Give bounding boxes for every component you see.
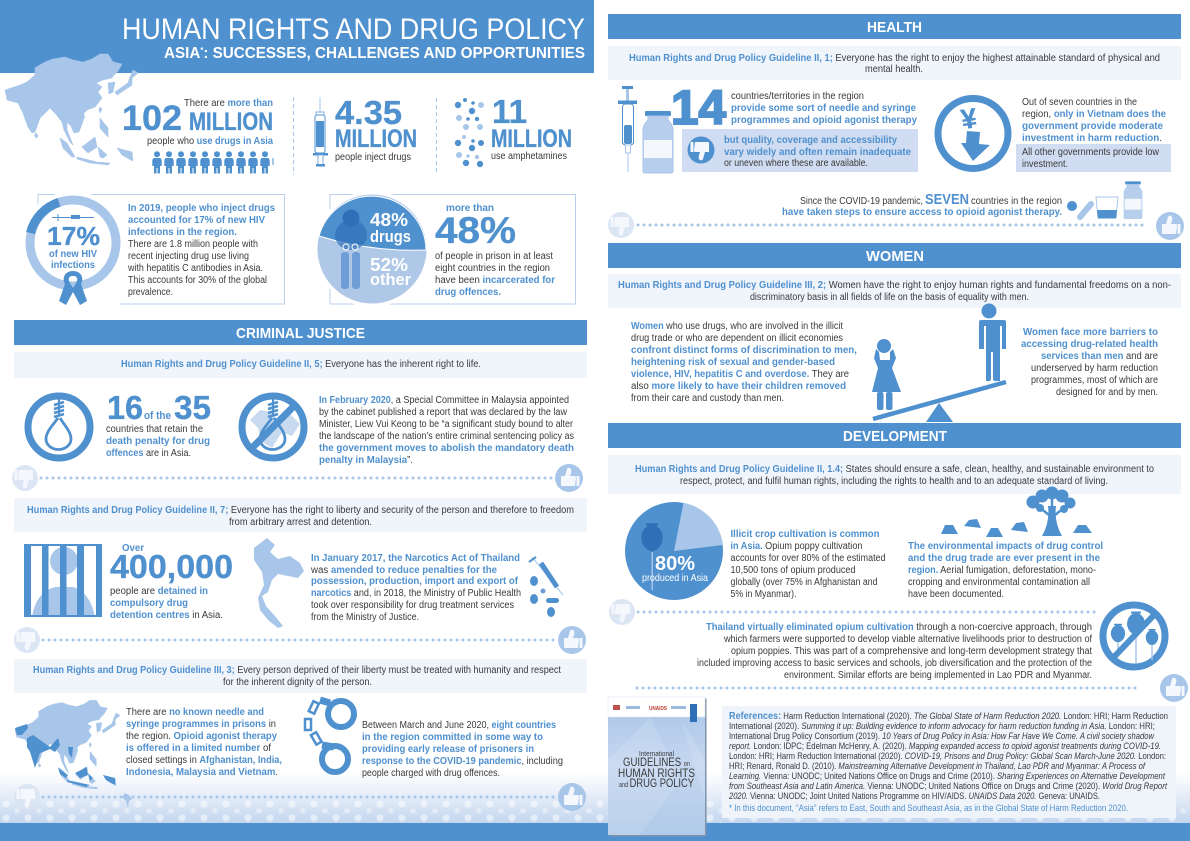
stat: 16 of the 35: countries that retain the bbox=[106, 424, 203, 435]
section heading: development: DEVELOPMENT bbox=[843, 428, 947, 445]
stat: 4.35 million inject: people inject drugs bbox=[335, 151, 411, 163]
stat: 16 of the 35: 16 bbox=[107, 389, 143, 426]
text: COVID-19 opioid agonist bbox=[782, 191, 1062, 218]
text: Malaysia bbox=[319, 395, 574, 466]
callout: quality inadequate: or uneven where these are available. bbox=[724, 158, 868, 169]
icon: person behind bars bbox=[24, 544, 102, 617]
text block: infections in the region. bbox=[128, 227, 237, 238]
text: early release: response to the COVID-19 pandemic, including bbox=[362, 756, 563, 767]
booklet cover: and DRUG POLICY bbox=[619, 776, 694, 790]
section heading: women bbox=[608, 243, 1181, 268]
text: women discrimination: from their care and custody than men. bbox=[631, 393, 784, 404]
text: investment in harm reduction: region, only in Vietnam does the bbox=[1022, 109, 1166, 120]
text: Thailand eliminated opium: included improving access to basic services and schools, job diversification and the protection of the bbox=[697, 658, 1092, 669]
references panel bbox=[722, 706, 1176, 818]
pie chart: 80% produced in Asia: 80% bbox=[655, 553, 695, 575]
text: Thailand narcotics act: In January 2017, the Narcotics Act of Thailand bbox=[311, 553, 520, 564]
panel: prison bbox=[314, 191, 576, 307]
references panel: * In this document, “Asia” refers to East, South and Southeast Asia, as in the Global State of Harm Reduction 2020. bbox=[729, 803, 1128, 813]
text: women discrimination: drug trade or who are dependent on illicit economies bbox=[631, 333, 843, 344]
stat: 102 million people use drugs: There are more than bbox=[184, 97, 273, 109]
text: Thailand eliminated opium: opium poppies. This was part of a comprehensive and long-term development strategy that bbox=[731, 646, 1092, 657]
guideline III, 3: for the inherent dignity of the person. bbox=[223, 677, 372, 688]
title: HUMAN RIGHTS AND DRUG POLICY bbox=[122, 13, 585, 46]
guideline II, 7: Human Rights and Drug Policy Guideline II, 7; Everyone has the right to liberty and security of the person and therefore to freedom bbox=[27, 505, 574, 516]
text block bbox=[435, 203, 555, 298]
icon: syringe and pills bbox=[529, 557, 563, 617]
callout: quality inadequate: but quality, coverage and accessibility bbox=[724, 135, 897, 146]
text: Thailand narcotics act: from the Ministry of Justice. bbox=[311, 612, 419, 623]
text block bbox=[127, 203, 275, 298]
icons: pills, cup and vial bbox=[1067, 181, 1142, 219]
references panel: International Drug Policy Consortium (2019). 10 Years of Drug Policy in Asia: How Far Have We Come. A civil society shadow bbox=[729, 731, 1154, 741]
pie chart: drugs vs other: 52% bbox=[370, 255, 408, 275]
text block: drug offences. bbox=[435, 287, 501, 298]
text: Thailand narcotics act: narcotics and, in 2018, the Ministry of Public Health bbox=[311, 588, 521, 599]
stat: 11 million amphetamines: 11 bbox=[492, 93, 527, 130]
booklet cover bbox=[608, 697, 706, 836]
guideline II, 1.4 bbox=[608, 455, 1181, 494]
text: environmental impacts: region. Aerial fumigation, deforestation, mono- bbox=[908, 565, 1096, 576]
text block: prevalence. bbox=[128, 287, 173, 298]
text: Thailand eliminated opium: which farmers were supported to develop viable alternative livelihoods prior to destruction of bbox=[723, 634, 1092, 645]
guideline II, 1: Human Rights and Drug Policy Guideline II, 1; Everyone has the right to enjoy the highest attainable standard of physical and bbox=[629, 53, 1160, 64]
text: women face more barriers: services than men and are bbox=[1041, 351, 1158, 362]
icon: no poppies bbox=[1103, 605, 1165, 667]
pie chart: drugs vs other: 48% bbox=[370, 210, 408, 230]
icon: Asia map with highlights bbox=[15, 700, 120, 789]
text block: In 2019, people who inject drugs bbox=[128, 203, 275, 214]
guideline II, 1: mental health. bbox=[865, 64, 923, 75]
icon: tree and stumps bbox=[941, 486, 1092, 537]
stat: 400,000 detained bbox=[110, 543, 233, 621]
guideline III, 3 bbox=[14, 659, 587, 693]
text block: have been incarcerated for bbox=[435, 275, 555, 286]
divider with thumbs: health bbox=[608, 212, 1184, 240]
text block: of people in prison in at least bbox=[435, 251, 553, 262]
text: Malaysia: Minister, Liew Vui Keong to be “a significant study bound to alter bbox=[319, 419, 574, 430]
text: needle and syringe in prisons: syringe programmes in prisons in bbox=[126, 719, 276, 730]
pie chart: drugs vs other bbox=[314, 191, 430, 307]
section heading: criminal justice bbox=[14, 320, 587, 345]
text: investment in harm reduction: investment. bbox=[1022, 159, 1068, 170]
donut chart 17% bbox=[21, 191, 125, 306]
divider with thumbs: justice 2 bbox=[14, 626, 586, 654]
guideline III, 2 bbox=[608, 274, 1181, 308]
text block: eight countries in the region bbox=[435, 263, 550, 274]
booklet cover: HUMAN RIGHTS bbox=[618, 766, 695, 780]
stat: 400,000 detained: Over bbox=[122, 543, 144, 554]
text: women discrimination bbox=[631, 321, 857, 404]
divider with thumb up: development bbox=[637, 674, 1188, 702]
text: women discrimination: Women who use drugs, who are involved in the illicit bbox=[631, 321, 843, 332]
booklet cover: UNAIDS bbox=[649, 706, 668, 712]
text: Thailand narcotics act: possession, production, import and export of bbox=[311, 576, 519, 587]
text: environmental impacts: The environmental impacts of drug control bbox=[908, 541, 1103, 552]
text block: with hepatitis C antibodies in Asia. bbox=[127, 263, 263, 274]
stat: 11 million amphetamines: use amphetamines bbox=[491, 150, 567, 162]
text: early release: Between March and June 2020, eight countries bbox=[362, 720, 556, 731]
text: needle and syringe in prisons: Indonesia, Malaysia and Vietnam. bbox=[126, 767, 278, 778]
text: women discrimination: violence, HIV, hepatitis C and overdose. They are bbox=[631, 369, 849, 380]
text: COVID-19 opioid agonist: Since the COVID-19 pandemic, bbox=[800, 196, 923, 207]
references panel: International (2020). Summing it up: Building evidence to inform advocacy for harm reduction funding in Asia. London: HRI; bbox=[729, 721, 1155, 731]
text: illicit crop cultivation bbox=[730, 529, 886, 600]
pie chart: drugs vs other: drugs bbox=[370, 227, 411, 246]
text: Thailand narcotics act: took over responsibility for drug treatment services bbox=[311, 600, 514, 611]
panel: HIV infections: 17% bbox=[47, 221, 100, 251]
stat: 400,000 detained: compulsory drug bbox=[110, 598, 188, 609]
icon: abolish noose over map bbox=[242, 396, 304, 458]
text: early release: in the region committed in some way to bbox=[362, 732, 543, 743]
pie chart: 80% produced in Asia: produced in Asia bbox=[642, 573, 708, 584]
references panel: report. London: IDPC; Edelman McHenry, A. (2020). Mapping expanded access to opioid agonist treatments during COVID-19. bbox=[729, 741, 1161, 751]
stat: 4.35 million inject: MILLION bbox=[335, 125, 417, 153]
stat: 102 million people use drugs: people who use drugs in Asia bbox=[147, 135, 273, 147]
stat: 102 million people use drugs bbox=[122, 97, 274, 174]
text: investment in harm reduction: investment in harm reduction. bbox=[1022, 133, 1162, 144]
section heading: health: HEALTH bbox=[867, 19, 922, 36]
stat: 16 of the 35: offences are in Asia. bbox=[106, 448, 191, 459]
text: early release: providing early release of prisoners in bbox=[362, 744, 534, 755]
text block: more than bbox=[446, 203, 494, 214]
guideline II, 7 bbox=[14, 498, 587, 532]
stat: 102 million people use drugs: 102 bbox=[122, 99, 182, 138]
text: investment in harm reduction: government provide moderate bbox=[1022, 121, 1163, 132]
guideline III, 2: discriminatory basis in all fields of life on the basis of equality with men. bbox=[750, 292, 1029, 303]
text: women discrimination: also more likely to have their children removed bbox=[631, 381, 846, 392]
guideline II, 7: from arbitrary arrest and detention. bbox=[229, 517, 372, 528]
text: needle and syringe in prisons: There are no known needle and bbox=[126, 707, 264, 718]
text: women discrimination: confront distinct forms of discrimination to men, bbox=[631, 345, 857, 356]
stat: 11 million amphetamines bbox=[491, 93, 572, 162]
icon: row of people bbox=[152, 151, 274, 174]
text: COVID-19 opioid agonist: countries in the region bbox=[971, 196, 1062, 207]
text: investment in harm reduction bbox=[1016, 97, 1171, 172]
guideline II, 5: Human Rights and Drug Policy Guideline II, 5; Everyone has the inherent right to life. bbox=[121, 359, 481, 370]
text block: There are 1.8 million people with bbox=[128, 239, 258, 250]
subtitle: : SUCCESSES, CHALLENGES AND OPPORTUNITIES bbox=[203, 45, 585, 62]
stat: 400,000 detained: detention centres in Asia. bbox=[110, 610, 223, 621]
guideline II, 5 bbox=[14, 352, 587, 378]
references panel: References: Harm Reduction International (2020). The Global State of Harm Reduction 2020. London: HRI; Harm Reduction bbox=[729, 710, 1168, 722]
booklet cover: GUIDELINES on bbox=[623, 755, 690, 769]
header banner bbox=[0, 0, 594, 73]
text: Thailand eliminated opium: environment. Similar efforts are being implemented in Lao PDR and Myanmar. bbox=[784, 670, 1092, 681]
text: environmental impacts bbox=[908, 541, 1103, 600]
icon: map of Thailand bbox=[254, 538, 304, 628]
text: Malaysia: In February 2020, a Special Committee in Malaysia appointed bbox=[319, 395, 569, 406]
stat: 4.35 million inject bbox=[335, 94, 417, 163]
stat: 11 million amphetamines: MILLION bbox=[491, 125, 572, 153]
references panel: London: HRI; Harm Reduction International (2020). COVID-19, Prisons and Drug Policy: Global Scan March-June 2020. London: bbox=[729, 751, 1166, 761]
icon: seesaw with woman and man bbox=[872, 304, 1006, 422]
guideline II, 1 bbox=[608, 46, 1181, 80]
text: illicit crop cultivation: globally (over 75% in Afghanistan and bbox=[730, 577, 878, 588]
stat: 400,000 detained: people are detained in bbox=[110, 586, 208, 597]
text: women face more barriers: programmes, most of which are bbox=[1031, 375, 1158, 386]
text: environmental impacts: have been documented. bbox=[908, 589, 1004, 600]
text: COVID-19 opioid agonist: SEVEN bbox=[925, 191, 969, 208]
divider with thumb down: development bbox=[609, 599, 1098, 625]
text: Thailand eliminated opium: Thailand virtually eliminated opium cultivation through a non-coercive approach, through bbox=[706, 622, 1092, 633]
icon: noose bbox=[28, 396, 90, 458]
text: Malaysia: the government moves to abolish the mandatory death bbox=[319, 443, 574, 454]
section heading: women: WOMEN bbox=[866, 248, 924, 265]
text: women face more barriers: underserved by harm reduction bbox=[1031, 363, 1158, 374]
text: Thailand narcotics act: was amended to reduce penalties for the bbox=[310, 565, 497, 576]
text: illicit crop cultivation: 5% in Myanmar). bbox=[730, 589, 796, 600]
subtitle: ASIA bbox=[164, 45, 202, 62]
text: illicit crop cultivation: accounts for over 80% of the estimated bbox=[730, 553, 886, 564]
guideline II, 1.4: respect, protect, and fulfil human rights, including the rights to health and to an adequate standard of living. bbox=[680, 476, 1108, 487]
bottom fade background bbox=[0, 772, 1190, 824]
text: investment in harm reduction: Out of seven countries in the bbox=[1022, 97, 1137, 108]
booklet cover: International bbox=[639, 751, 674, 758]
pie chart: drugs vs other: other bbox=[370, 270, 411, 289]
text: women face more barriers bbox=[1021, 327, 1158, 398]
text: Malaysia: by the cabinet published a report that was declared by the law bbox=[319, 407, 568, 418]
text: women face more barriers: accessing drug-related health bbox=[1021, 339, 1158, 350]
guideline II, 1.4: Human Rights and Drug Policy Guideline II, 1.4; States should ensure a safe, clean, healthy, and sustainable environment to bbox=[635, 464, 1154, 475]
stat: 16 of the 35: 35 bbox=[174, 389, 211, 426]
guideline III, 3: Human Rights and Drug Policy Guideline III, 3; Every person deprived of their liberty must be treated with humanity and respect bbox=[33, 665, 561, 676]
text: Malaysia: penalty in Malaysia”. bbox=[319, 455, 413, 466]
icon: map of Asia bbox=[5, 54, 138, 165]
divider with thumbs: justice 3 bbox=[14, 783, 586, 811]
text: investment in harm reduction: All other governments provide low bbox=[1022, 147, 1160, 158]
text: early release bbox=[362, 720, 563, 779]
icon: pills bbox=[455, 98, 484, 167]
stat: 16 of the 35 bbox=[106, 389, 211, 459]
stat: 14 countries bbox=[671, 82, 917, 135]
text: Thailand eliminated opium bbox=[697, 622, 1092, 681]
references panel: 2020. Vienna: UNODC; Joint United Nations Programme on HIV/AIDS. UNAIDS Data 2020. Geneva: UNAIDS. bbox=[728, 791, 1100, 801]
section heading: criminal justice: CRIMINAL JUSTICE bbox=[236, 325, 365, 342]
stat: 4.35 million inject: 4.35 bbox=[335, 94, 402, 131]
section heading: development bbox=[608, 423, 1181, 448]
text: early release: people charged with drug offences. bbox=[362, 768, 500, 779]
text block: This accounts for 30% of the global bbox=[128, 275, 267, 286]
icon: yen with down arrow: ¥ bbox=[959, 102, 979, 135]
stat: 102 million people use drugs: MILLION bbox=[189, 108, 273, 136]
text: needle and syringe in prisons: the region. Opioid agonist therapy bbox=[126, 731, 277, 742]
panel: HIV infections bbox=[21, 191, 284, 306]
stat: 14 countries: 14 bbox=[671, 82, 726, 135]
stat: 16 of the 35: of the bbox=[144, 410, 171, 422]
text: needle and syringe in prisons: closed settings in Afghanistan, India, bbox=[126, 755, 282, 766]
guideline III, 2: Human Rights and Drug Policy Guideline III, 2; Women have the right to enjoy human rights and fundamental freedoms on a non- bbox=[618, 280, 1171, 291]
text: women face more barriers: Women face more barriers to bbox=[1023, 327, 1158, 338]
icon: syringe bbox=[313, 97, 328, 166]
stat: 16 of the 35: death penalty for drug bbox=[106, 436, 210, 447]
text: illicit crop cultivation: 10,500 tons of opium produced bbox=[730, 565, 856, 576]
icon: handcuffs bbox=[305, 700, 354, 772]
panel: HIV infections: infections bbox=[51, 260, 95, 271]
icon: ribbon bbox=[59, 271, 87, 305]
icon: syringe and vial bbox=[618, 86, 673, 173]
pie chart: 80% produced in Asia bbox=[625, 502, 723, 600]
callout: quality inadequate bbox=[682, 129, 918, 172]
callout: quality inadequate: vary widely and often remain inadequate bbox=[724, 147, 911, 158]
text: needle and syringe in prisons: is offered in a limited number of bbox=[126, 743, 271, 754]
bottom band bbox=[0, 823, 1190, 841]
references panel: Learning. Vienna: UNODC; United Nations Office on Drugs and Crime (2010). Sharing Experiences on Alternative Development bbox=[729, 771, 1165, 781]
text: illicit crop cultivation: in Asia. Opium poppy cultivation bbox=[730, 541, 862, 552]
text block: accounted for 17% of new HIV bbox=[128, 215, 265, 226]
stat: 14 countries: countries/territories in the region bbox=[731, 91, 864, 102]
text: women face more barriers: designed for and by men. bbox=[1056, 387, 1158, 398]
subtitle: * bbox=[200, 46, 204, 55]
references panel: HRI; Renard, Ronald D. (2010). Mainstreaming Alternative Development in Thailand, Lao PDR and Myanmar: A Process of bbox=[729, 761, 1146, 771]
text: women discrimination: heightening risk of sexual and gender-based bbox=[631, 357, 835, 368]
text: environmental impacts: cropping and environmental contamination all bbox=[908, 577, 1090, 588]
stat: 14 countries: programmes and opioid agonist therapy bbox=[731, 115, 917, 126]
references panel: from Southeast Asia and Latin America. Vienna: UNODC; United Nations Office on Drugs and Crime (2020). World Drug Report bbox=[729, 781, 1167, 791]
text: environmental impacts: and the drug trade are ever present in the bbox=[908, 553, 1100, 564]
panel: HIV infections: of new HIV bbox=[49, 249, 97, 260]
text block: 48% bbox=[435, 210, 516, 251]
divider with thumbs: justice 1 bbox=[12, 464, 583, 492]
stat: 14 countries: provide some sort of needle and syringe bbox=[731, 103, 916, 114]
section heading: health bbox=[608, 14, 1181, 39]
text block: recent injecting drug use living bbox=[128, 251, 249, 262]
stat: 400,000 detained: 400,000 bbox=[110, 548, 233, 585]
text: needle and syringe in prisons bbox=[126, 707, 282, 778]
text: Malaysia: the landscape of the nation’s entire criminal sentencing policy as bbox=[319, 431, 574, 442]
text: illicit crop cultivation: Illicit crop cultivation is common bbox=[730, 529, 880, 540]
text: COVID-19 opioid agonist: have taken steps to ensure access to opioid agonist therapy. bbox=[782, 207, 1062, 218]
text: Thailand narcotics act bbox=[310, 553, 521, 623]
icon: yen with down arrow bbox=[938, 98, 1008, 168]
